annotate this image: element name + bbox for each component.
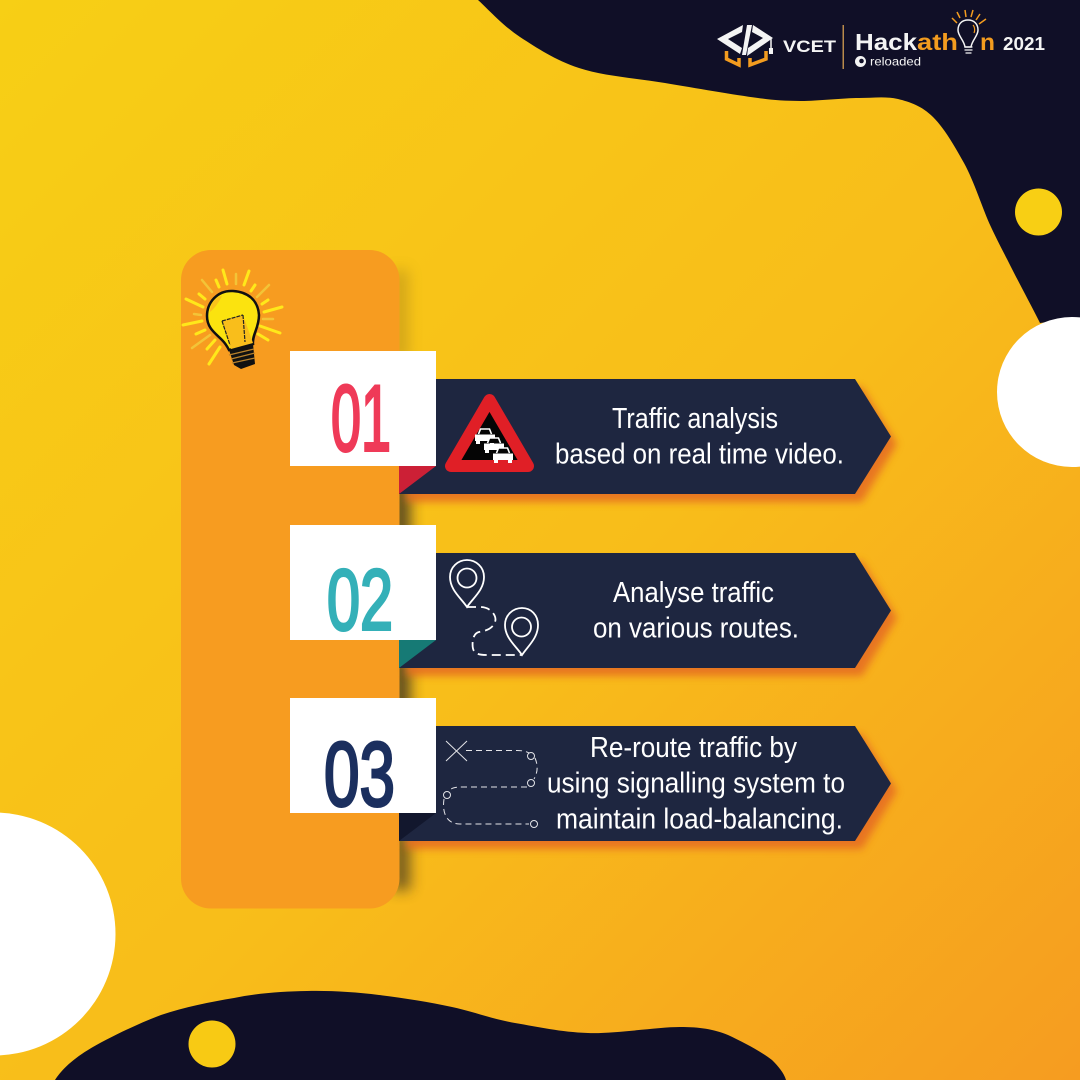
text: step 1: Traffic analysis [612, 403, 778, 435]
text: step 3: using signalling system to [547, 768, 845, 800]
text: 2021: 2021 [1003, 34, 1045, 54]
text: Hack: Hack [855, 29, 918, 55]
car 1 [475, 429, 495, 444]
fold [399, 466, 436, 494]
white number box [290, 698, 436, 813]
text: step 3 [547, 732, 845, 836]
step 2 [290, 525, 897, 676]
car 3 [493, 448, 513, 463]
icon: logo bulb [952, 10, 986, 53]
panel shadow [392, 270, 410, 890]
icon: graduation cap code logo [717, 25, 773, 65]
icon: dashed route [444, 741, 538, 828]
text: step 2: Analyse traffic [613, 577, 774, 609]
step 1 [290, 351, 897, 502]
step 3 [290, 698, 897, 849]
ribbon [399, 379, 891, 494]
icon: traffic warning sign [451, 400, 528, 466]
icon: light bulb [183, 270, 282, 369]
text: step 1: based on real time video. [555, 438, 844, 470]
icon: route pins [450, 560, 538, 655]
number 02: 02 [327, 552, 393, 648]
dark blob: bottom [55, 991, 786, 1080]
ribbon [399, 726, 891, 841]
text: step 3: Re-route traffic by [590, 732, 798, 764]
icon: reloaded mark [855, 56, 866, 67]
fold [399, 640, 436, 668]
logo: VCET Hackathon 2021 [717, 10, 1045, 69]
divider [842, 25, 844, 69]
ribbon shadow [406, 561, 897, 676]
ribbon [399, 553, 891, 668]
car 2 [484, 438, 504, 453]
number 03: 03 [324, 724, 395, 826]
fold [399, 813, 436, 841]
text: step 2: on various routes. [593, 612, 799, 644]
number 01: 01 [331, 366, 391, 470]
text: reloaded: reloaded [870, 54, 921, 68]
dark blob: top right [478, 0, 1080, 323]
text: step 2 [593, 577, 799, 644]
panel: orange column [181, 250, 400, 908]
text: VCET: VCET [783, 37, 837, 56]
white number box [290, 351, 436, 466]
text: ath: ath [917, 29, 958, 55]
circle: yellow bottom [188, 1020, 236, 1068]
circle: white right [997, 317, 1080, 467]
circle: yellow right [1015, 188, 1062, 236]
text: n: n [980, 29, 995, 55]
circle: white bottom left [0, 812, 116, 1056]
white number box [290, 525, 436, 640]
ribbon shadow [406, 734, 897, 849]
text: step 1 [555, 403, 844, 470]
ribbon shadow [406, 387, 897, 502]
text: step 3: maintain load-balancing. [556, 804, 843, 836]
